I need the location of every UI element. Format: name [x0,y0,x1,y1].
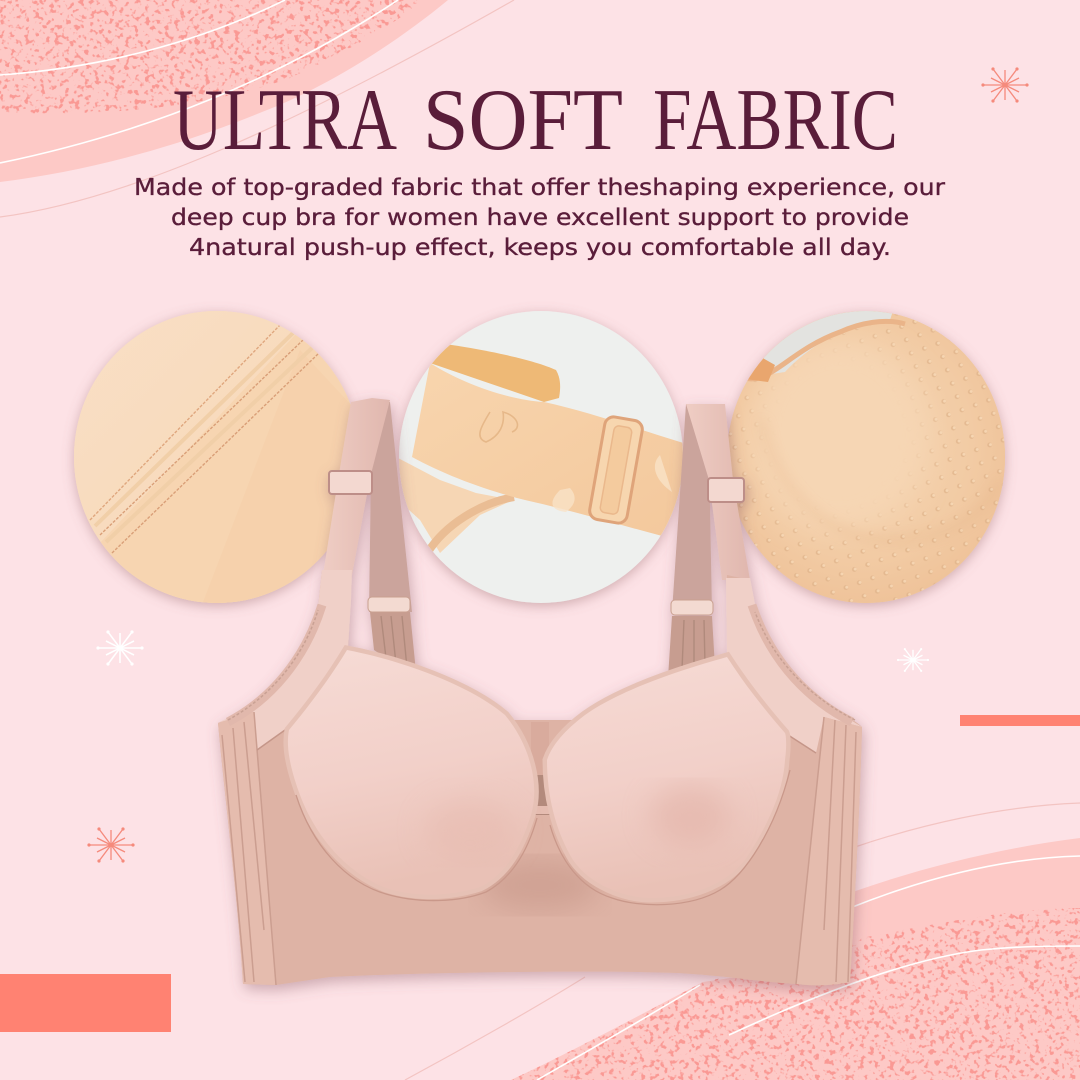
icon: coral sparkle lower left [87,827,135,863]
left cup [288,650,534,895]
cup shading [654,784,724,840]
description text [134,173,945,261]
right cup [547,657,786,898]
back straps [368,402,715,678]
lower strap piece [398,458,513,553]
description text: Made of top-graded fabric that offer theshaping experience, our [134,173,945,201]
side boning: left [222,605,322,985]
accent bar: right [960,715,1080,726]
title: FABRIC [653,72,898,169]
strap band [412,363,690,540]
description text: 4natural push-up effect, keeps you comfortable all day. [189,233,891,261]
foam lining [430,343,560,402]
detail circle: adjustable strap [398,311,690,603]
slider buckle [588,415,644,525]
front straps [323,398,750,580]
title [173,72,898,169]
accent bar: bottom left [0,974,171,1032]
title: SOFT [423,72,623,169]
icon: coral sparkle top right [981,67,1029,103]
product: shaping bra [218,398,862,985]
icon: white sparkle right [897,648,929,672]
detail circle: dotted cup padding [720,305,1010,605]
side boning: right [752,605,856,984]
title: ULTRA [173,72,397,169]
icon: white sparkle left [96,630,144,666]
description text: deep cup bra for women have excellent support to provide [171,203,909,231]
shoulder panel: right [726,578,862,753]
center bridge shading [480,859,600,911]
shoulder panel: left [218,570,352,750]
bra body [218,570,862,985]
decorative wave: top left [0,0,514,217]
decorative wave: bottom right [405,803,1080,1080]
cup edge stitching [296,770,790,905]
side panel: left [218,712,276,985]
detail circle: fabric seams [70,310,365,610]
side panel: right [796,717,862,985]
